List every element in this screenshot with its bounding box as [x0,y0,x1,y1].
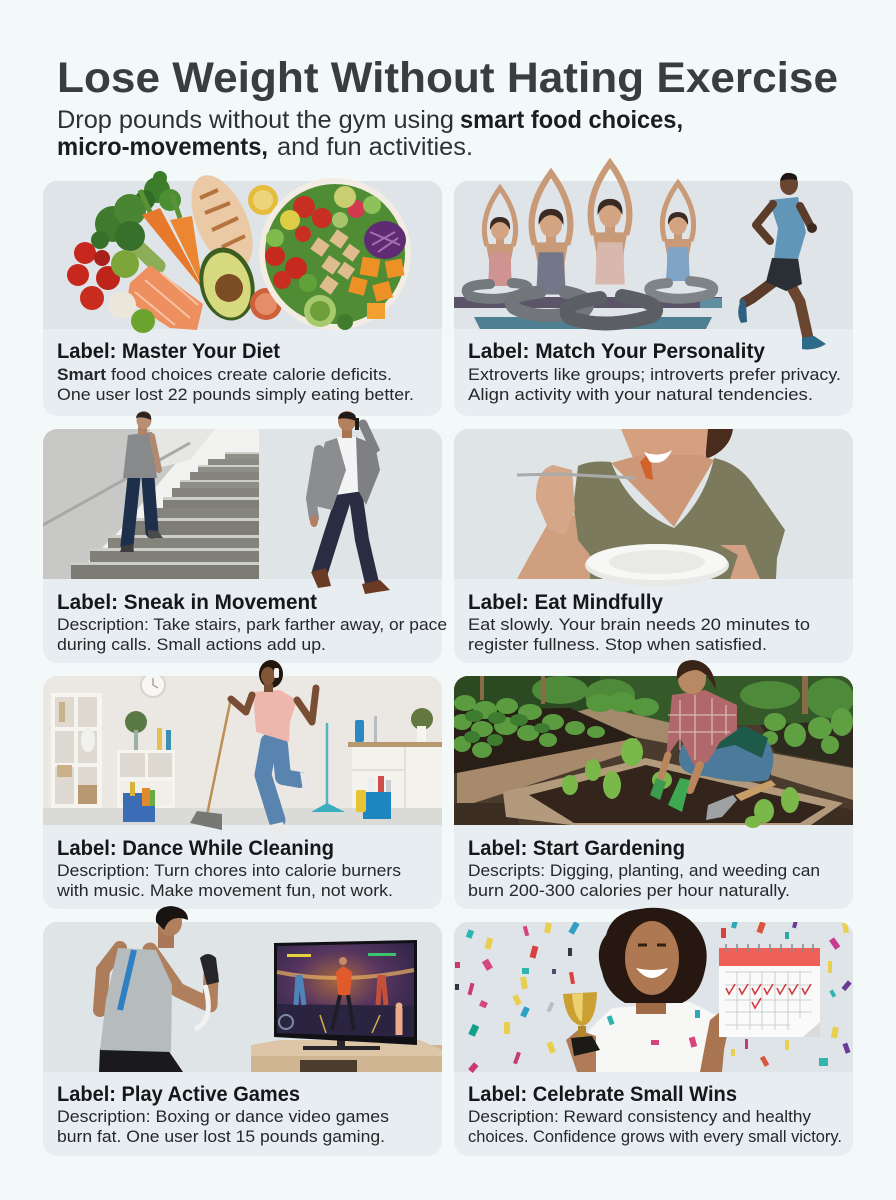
subtitle: Drop pounds without the gym using [57,106,454,134]
icon: calendar with checkmarks [719,944,820,1037]
description text: choices. Confidence grows with every small victory. [468,1127,842,1146]
description text: Descripts: Digging, planting, and weeding can [468,861,820,880]
description text: Align activity with your natural tendencies. [468,385,813,404]
label text: Label: Sneak in Movement [57,591,317,614]
subtitle: micro-movements, [57,133,268,161]
label text: Label: Play Active Games [57,1083,300,1106]
description text [468,615,810,654]
illustration: room background [43,673,442,830]
description text: Smart [57,365,106,384]
description text [57,365,414,404]
description text: Extroverts like groups; introverts prefer privacy. [468,365,841,384]
description text: burn fat. One user lost 15 pounds gaming. [57,1127,385,1146]
description text: food choices create calorie deficits. [111,365,392,384]
confetti [455,919,852,1073]
description text [57,1107,389,1146]
description text [57,615,447,654]
illustration: TV with game [251,940,442,1072]
man walking upstairs [120,411,163,552]
panel: Eat Mindfully [454,429,853,663]
label text: Label: Celebrate Small Wins [468,1083,737,1106]
description text: One user lost 22 pounds simply eating better. [57,385,414,404]
label text: Label: Start Gardening [468,837,685,860]
panel: Match Your Personality [454,163,853,416]
label text: Label: Dance While Cleaning [57,837,334,860]
description text: with music. Make movement fun, not work. [56,881,393,900]
label text: Label: Match Your Personality [468,340,765,363]
subtitle [57,106,683,161]
subtitle: smart food choices, [460,106,683,134]
illustration: group yoga [454,163,826,349]
woman gardening [650,660,773,812]
panel: Play Active Games [43,906,442,1156]
subtitle: and fun activities. [277,133,473,161]
illustration: woman eating [517,429,785,586]
panel: Celebrate Small Wins [454,908,853,1156]
label text: Label: Master Your Diet [57,340,280,363]
description text [468,1107,842,1146]
description text: during calls. Small actions add up. [57,635,326,654]
description text [468,861,820,900]
description text: Description: Boxing or dance video games [57,1107,389,1126]
illustration: boxer [99,906,219,1072]
celebrating woman [566,908,729,1072]
panel: Start Gardening [452,660,854,909]
description text: register fullness. Stop when satisfied. [468,635,767,654]
description text: Description: Reward consistency and healthy [468,1107,811,1126]
description text [468,365,841,404]
description text: Description: Take stairs, park farther away, or pace [57,615,447,634]
businessman on phone [310,411,390,594]
description text: Description: Turn chores into calorie burners [57,861,401,880]
panel: Dance While Cleaning [43,660,442,909]
description text [56,861,401,900]
title: Lose Weight Without Hating Exercise [57,54,838,102]
panel: Master Your Diet [43,166,442,416]
illustration: man on stairs [43,429,259,579]
icon: trophy [563,992,600,1056]
label text: Label: Eat Mindfully [468,591,663,614]
dancing woman [231,660,316,834]
panel: Sneak in Movement [43,411,447,663]
description text: Eat slowly. Your brain needs 20 minutes to [468,615,810,634]
illustration: garden beds [452,676,854,828]
description text: burn 200-300 calories per hour naturally. [468,881,790,900]
illustration: healthy food spread [67,166,411,333]
runner figure [738,173,826,349]
